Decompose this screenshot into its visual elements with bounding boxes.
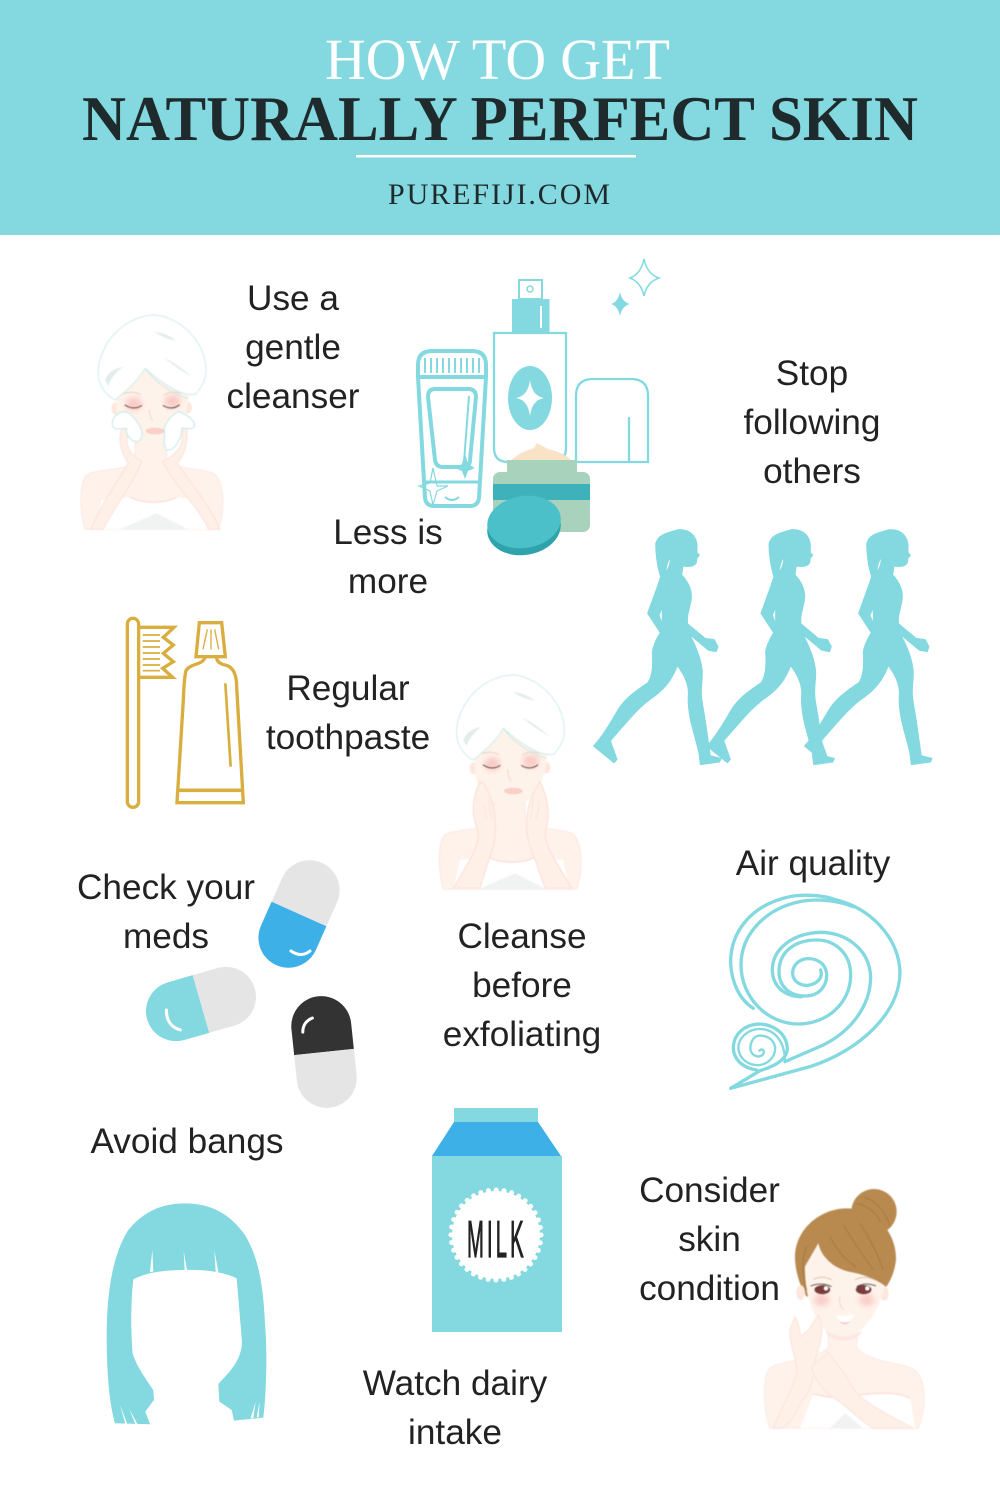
text: cleanse before exfoliating: Cleanse: [457, 917, 587, 956]
teal pill: [139, 960, 263, 1048]
text: less is more: Less is: [333, 513, 443, 552]
text: regular toothpaste: Regular: [286, 669, 410, 708]
icon: box: [576, 379, 648, 462]
foam: [112, 412, 142, 442]
toothbrush: [127, 618, 174, 807]
title line: NATURALLY PERFECT SKIN: NATURALLY PERFECT SKIN: [82, 83, 918, 154]
illustration: skincare products: [418, 259, 659, 560]
illustration: woman cleansing: [439, 675, 581, 889]
text: cleanse before exfoliating: before: [472, 966, 572, 1005]
icon: air spiral shell: [731, 895, 900, 1088]
illustration: woman with hair bun: [764, 1189, 924, 1428]
blue pill: [249, 851, 349, 977]
text: avoid bangs: Avoid bangs: [90, 1122, 284, 1161]
bun: [851, 1189, 897, 1234]
illustration: woman washing face: [81, 315, 223, 529]
text: less is more: more: [348, 562, 428, 601]
icon: milk carton: [432, 1108, 562, 1332]
text: use a gentle cleanser: gentle: [245, 328, 341, 367]
text: consider skin condition: condition: [639, 1269, 780, 1308]
header band: [0, 0, 1000, 235]
text: check your meds: Check your: [77, 868, 255, 907]
icon: spray bottle: [494, 333, 566, 462]
arms: [91, 427, 142, 529]
text: consider skin condition: Consider: [639, 1171, 780, 1210]
title line: HOW TO GET: HOW TO GET: [325, 27, 670, 92]
left hand and arm: [453, 782, 495, 888]
text: cleanse before exfoliating: exfoliating: [443, 1015, 601, 1054]
icon: hollow sparkle: [630, 259, 659, 296]
text: use a gentle cleanser: Use a: [247, 279, 339, 318]
text: check your meds: meds: [123, 917, 209, 956]
milk label: [451, 1190, 541, 1280]
icon: round soap: [483, 496, 565, 560]
ears: [796, 1285, 805, 1300]
title: [82, 27, 918, 154]
icon: jar of cream: [510, 443, 572, 461]
text: air quality: Air quality: [736, 844, 891, 883]
text: consider skin condition: skin: [678, 1220, 741, 1259]
icon: toothbrush and toothpaste: [127, 618, 243, 807]
hands and arms: [773, 1315, 822, 1428]
text: watch dairy intake: intake: [408, 1413, 502, 1452]
text: stop following others: following: [744, 403, 880, 442]
face: [805, 1243, 885, 1335]
right hand and arm: [527, 782, 572, 888]
text: regular toothpaste: toothpaste: [266, 718, 430, 757]
icon: tube: [418, 351, 486, 506]
text: use a gentle cleanser: cleanser: [226, 377, 360, 416]
text: stop following others: others: [763, 452, 861, 491]
toothpaste tube: [177, 623, 243, 803]
website label: PUREFIJI.COM: [388, 178, 610, 211]
icon: pills: [139, 851, 360, 1111]
illustration: walking silhouettes: [594, 530, 932, 764]
black pill: [288, 993, 360, 1111]
hair back: [795, 1208, 896, 1297]
shoulders and neck: [764, 1323, 924, 1428]
text: watch dairy intake: Watch dairy: [363, 1364, 548, 1403]
text: stop following others: Stop: [776, 354, 848, 393]
icon: solid sparkle: [611, 292, 630, 316]
milk label: MILK: [467, 1211, 527, 1269]
icon: hair with bangs: [107, 1203, 266, 1424]
